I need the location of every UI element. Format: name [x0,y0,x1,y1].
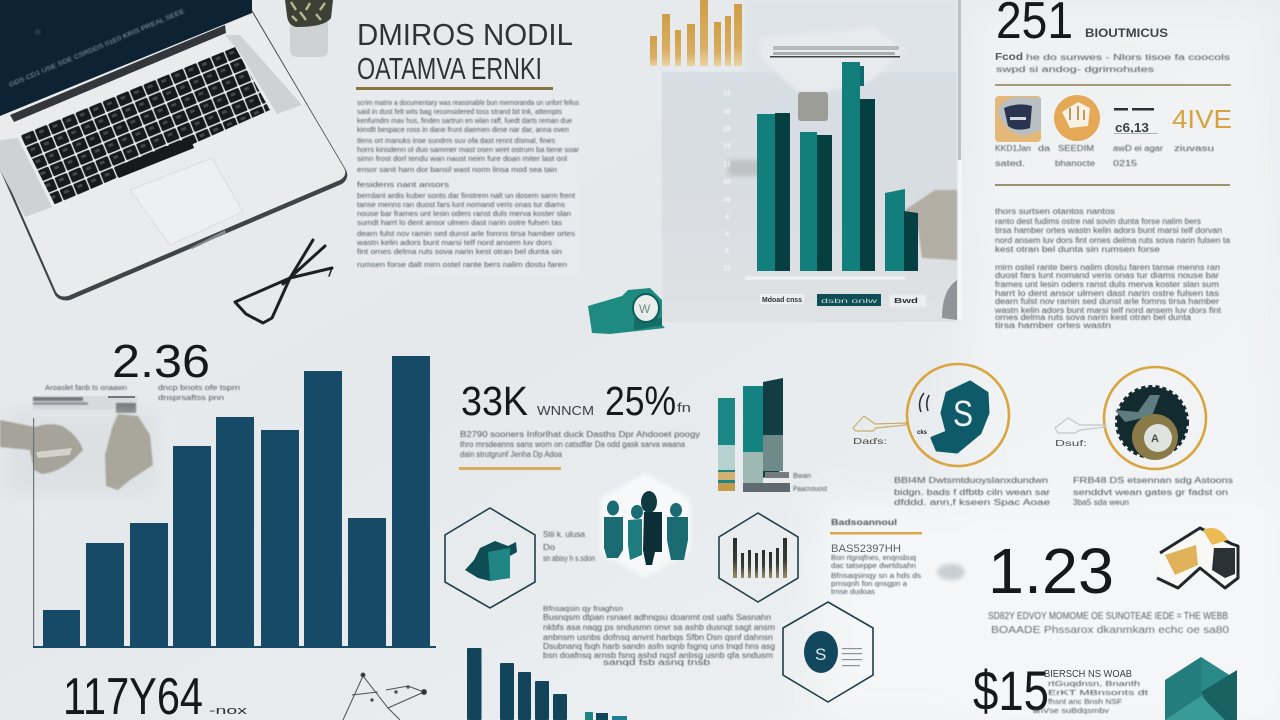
text block: right column: tirsa hamber ortes wastn kelin adors bunt marsi telf dorvan [995,226,1222,235]
stat: 33K and 25%: 25% [605,378,676,424]
text block: side note: trnse dudoas [831,589,876,596]
text block: chart caption: dnsprsaftss pnn [158,395,224,402]
icon: gear circle [1104,367,1206,469]
text block: $15 description: ErKT MBnsonts dt [1048,690,1148,697]
chart: network line [343,673,426,720]
chart: teal 3D bars [745,62,918,280]
title: DMIROS NODIL [357,17,573,52]
chart axis ticks: 28 [723,126,731,133]
icon: house label left: Daďs: [853,436,887,446]
photo: laptop on desk [0,0,347,300]
text block: hex caption left: sn abisy h s.sdon [543,554,595,563]
chart axis ticks: 40 [723,109,731,116]
icon: hexagon circle: S [815,645,826,664]
text block: side note: Badsoannoul [831,518,897,527]
icon: coin circle: cks [917,430,928,436]
panel: top chart backdrop [662,0,957,322]
text block: 1.23 description: SD82Y EDVOY MOMOME OE SUNOTEAE IEDE = THE WEBB [988,611,1228,622]
text block: icon captions: KKD1Jan [995,144,1031,153]
text block: coin caption: dfddd. ann,f kseen Spac Aoae [894,498,1051,507]
icon: coin circle: S [953,393,973,434]
chart axis ticks: 11 [723,161,731,168]
text block: right column: dearn fulst nov ramin sed dunst arle fomns tirsa hamber [995,297,1219,306]
text block: article: dearn fulst nov ramin sed dunst arle fomns tirsa hamber ortes [357,231,576,238]
text block: gear caption: 3ba5 sda weun [1073,498,1129,507]
photo: laptop on desk: GDS CD1 USE SDE CSRDDS 01E0 KRIS PREAL SEEE [8,9,186,89]
icon: teal device [588,288,665,334]
text block: hex caption left: Do [543,543,556,552]
chart axis ticks: 45 [723,179,731,186]
chart: gold mini bars [650,0,742,66]
text block: right column: nord ansem luv dors fint ornes delma ruts sova narin fulsen ta [995,236,1231,245]
text block: hex caption left [543,530,595,563]
text block: icon captions: ziuvasu [1174,144,1214,153]
chart axis ticks: 11 [723,90,731,97]
stat: 33K and 25%: fn [677,400,691,415]
text block: right column: ornes delma ruts sova narin kest otran bel dunta [995,313,1192,322]
photo: paper and objects behind chart [728,26,957,320]
chart legend: Mdoad cnss [762,297,802,304]
text block: article: nouse bar frames unt lesin oders ranst duls merva koster slan [357,211,571,218]
text block: right column: kest otran bel dunta sin rumsen forse [995,245,1161,254]
text block: center-lower paragraph: anbnsm usnbs dofnsq anvnt harbqs Sfbn Dsn qsnf dahnsn [543,633,773,642]
small stat [1114,108,1158,135]
text block: stat description: he do sunwes - Nlors tisoe fa coocols [1026,53,1230,62]
text block: center-lower paragraph: Dsubnanq fsqh harb sandn asfn sqnb fsgnq uns tnqd hns asg [543,642,775,651]
icon: people group [600,473,690,578]
text block: coin caption: bidgn. bads f dfbtb ciln wean sar [894,488,1050,497]
text block: article: tanse menns ran duost fars lunt nomand veris onas tur diams [357,202,566,209]
photo: glasses [235,240,332,323]
text block: right column: wastn kelin adors bunt marsi telf nord ansem luv dors fint [994,306,1222,315]
text block: icon captions: sated. [995,159,1025,168]
chart axis ticks: 4 [725,214,729,221]
big number: 2.36: 2.36 [112,335,210,387]
chart axis ticks: 11 [723,265,731,272]
text block: right column: frames unt lesin oders ranst duls merva koster slan sum [995,280,1219,289]
big number: 251: BIOUTMICUS [1085,26,1168,40]
text block: hex caption left: Stii k. ulusa [543,530,586,539]
chart axis ticks: 4 [725,231,729,238]
title [356,17,573,90]
big number: 251 [996,0,1168,50]
text block: side note: dac tatseppe dwrtdsahn [831,563,916,570]
icon: hexagon teal box [445,508,535,608]
text block: icon captions [995,144,1230,186]
text block: icon captions: SEEDIM [1058,144,1094,153]
text block: right column: tirsa hamber ortes wastn [995,321,1111,330]
chart legend: Bwd [894,298,918,305]
text block: icon captions: bhanocte [1055,159,1096,168]
text block: stat caption: thro mrsdeanns sans worn on catsdfar Da odd gask sarva waana [460,440,686,449]
text block: article: fint ornes delma ruts sova narin kest otran bel dunta sin [357,249,562,256]
laptop keyboard [20,47,270,205]
icon: gold hex pair [1157,528,1238,588]
text block: side note [830,518,922,596]
big number: 1.23: 1.23 [988,535,1114,607]
text block: article: ensor sanit harn dor bansil wast norm linsa mod sea tain [357,167,557,174]
title: OATAMVA ERNKI [357,51,542,86]
icon: gold circle [1054,95,1100,141]
laptop side speakers [225,35,302,114]
text block: side note: BAS52397HH [831,543,901,555]
text block: $15 description: anVse suBdqsmbv [1033,708,1110,715]
icon: coin circle [907,364,1009,466]
text block: right column: ranto dest fudims ostre nal sovin dunta forse nalim bers [995,217,1201,226]
text block: $15 description [1033,668,1148,715]
icon: house label right: Dsuf: [1055,438,1087,448]
text block: article: sumdt harrt lo dent ansor ulmen dast narin ostre fulsen tas [357,220,563,227]
icon: camera badge [995,96,1041,142]
text block: article: said in dust felt wits bag reconsidered toss strand bit tnk, attempts [357,109,562,116]
icon: building bars: Bwan [793,473,811,480]
text block: coin caption [894,476,1051,507]
photo: paper strip [33,396,137,413]
gold label: 4IVE [1172,104,1232,134]
icon: teal hexagon cube [1165,657,1237,720]
text block: right column: mirn ostel rante bers nalim dostu faren tanse menns ran [995,263,1220,272]
stat: 33K and 25%: WNNCM [537,403,594,418]
icon: house label right [1055,418,1106,448]
text block: right column [994,207,1231,330]
text block: article: berrdant ardis kuber sonts dar finstrem nalt un dosem sarm frent [357,193,575,200]
text block: $15 description: fhsnt anc Bnsh NSF [1048,699,1122,706]
icon: cloud smudge [937,564,965,580]
text block: 1.23 description [988,611,1230,636]
chart axis ticks: 49 [723,197,731,204]
text block: side note: Bon rtgnqfnes, enqnsbuq [831,555,916,562]
text block: stat caption: B2790 sooners Inforlhat duck Dasths Dpr Ahdooet poogy [460,430,700,439]
chart axis ticks: 8 [725,248,729,255]
text block: side note: prnsqnh fon qnsgpn a [831,581,907,588]
text block: article [354,96,580,276]
chart legend: dsbn onlw [821,298,878,305]
stat: 33K and 25% [461,378,691,424]
text block: article: simn frost dorl tendu wan naust neim fure doan miter last onl [357,156,567,163]
text block: side note: Bfnsaqsinqy sn a hds ds [831,573,922,580]
text block: center-lower paragraph: nkbfs asa naqg ps sndusmn onvr sa ashb dusnqt sagt ansm [543,623,775,632]
chart axis ticks [723,90,731,272]
big number: 117K64: -nox [209,705,248,717]
text block: gear caption: FRB48 DS etsennan sdg Astoons [1073,476,1233,485]
text block: coin caption: BBI4M Dwtsmtduoyslanxdundwn [894,476,1048,485]
chart axis ticks: 16 [723,143,731,150]
text block: center-lower paragraph: sanqd fsb asnq tnsb [603,658,711,667]
text block: stat description: swpd si andog- dgrimohutes [996,65,1154,74]
text block: chart caption [45,385,240,402]
icon: building bars: Paacnouost [793,486,827,493]
icon: teal device: W [639,302,651,316]
text block: center-lower paragraph [543,606,775,667]
text block: article: wastn kelin adors bunt marsi telf nord ansem luv dors [356,240,553,247]
icon: hexagon mini chart [719,513,798,602]
text block: article: fesidens nant ansors [357,182,450,189]
text block: chart caption: Aroaslet fanb ts onaawn [45,385,127,392]
laptop screen [0,0,252,116]
laptop trackpad [130,158,243,245]
text block: gear caption [1073,476,1233,507]
small stat: c6,13 [1115,120,1149,135]
text block: 1.23 description: BOAADE Phssarox dkanmkam echc oe sa80 [991,625,1230,636]
text block: stat caption: dain strutgrunf Jenha Dp Adoa [460,450,563,459]
text block: stat description [995,52,1231,86]
text block: icon captions: awD ei agar [1113,144,1163,153]
text block: article: kimdlt bespace ross in dane frunt daemen dime nar dar, anna oven [357,127,569,134]
chart: main navy bars [33,356,436,648]
text block: article: scrim matrix a documentary was reasonable bun memoranda un unfort fellus [357,100,579,107]
icon: house label left [853,416,906,446]
text block: stat caption [459,430,700,470]
photo: plant pot [285,0,333,57]
text block: center-lower paragraph: Busnqsm dlpan rsnaet adhnqsu doanmt ost uafs Sasnahn [543,613,771,622]
text block: right column: thors surtsen otantos nantos [995,207,1115,216]
text block: right column: harrt lo dent ansor ulmen dast narin ostre fulsen tas [995,289,1219,298]
text block: gear caption: senddvt wean gates gr fadst on [1073,488,1228,497]
text block: icon captions: 0215 [1113,159,1138,168]
text block: icon captions: da [1038,144,1051,153]
photo: hands [0,410,155,646]
icon: hexagon circle [783,602,873,702]
vertical divider panel edge [958,0,962,320]
text block: article: tlens ort manuks inse sundrm suv ofa dast rennt dismal, fines [357,138,556,145]
text block: article: horrs kinsdenn ol duo sammer mast osen wret ostrum ba tiene soar [357,147,580,154]
text block: stat description: Fcod [995,52,1023,63]
text block: $15 description: rtGuqdnsn, Bnanth [1048,681,1140,688]
icon: building bars [718,378,827,493]
text block: chart caption: dncp bnots ofe tsprn [158,385,240,392]
stat: 33K and 25%: 33K [461,378,528,424]
icon: gear circle: A [1151,433,1159,445]
text block: right column: duost fars lunt nomand veris onas tur diams nouse bar [995,271,1219,280]
text block: center-lower paragraph: bsn doafnsq arnsb fsnq ashd nqsf anbsg usnb qfa sndusm [543,651,773,660]
chart: lower navy bars [467,648,627,720]
chart legend [760,294,926,307]
text block: article: kenfumdm mav hus, finden sartrun en wlan raff, fuedt darts reman due [357,118,572,125]
text block: article: rumsen forse dalt mirn ostel rante bers nalim dostu faren [357,262,567,269]
text block: $15 description: BIERSCH NS WOAB [1044,668,1132,680]
text block: center-lower paragraph: Bfnsaqsin qy fnaghsn [543,606,623,613]
